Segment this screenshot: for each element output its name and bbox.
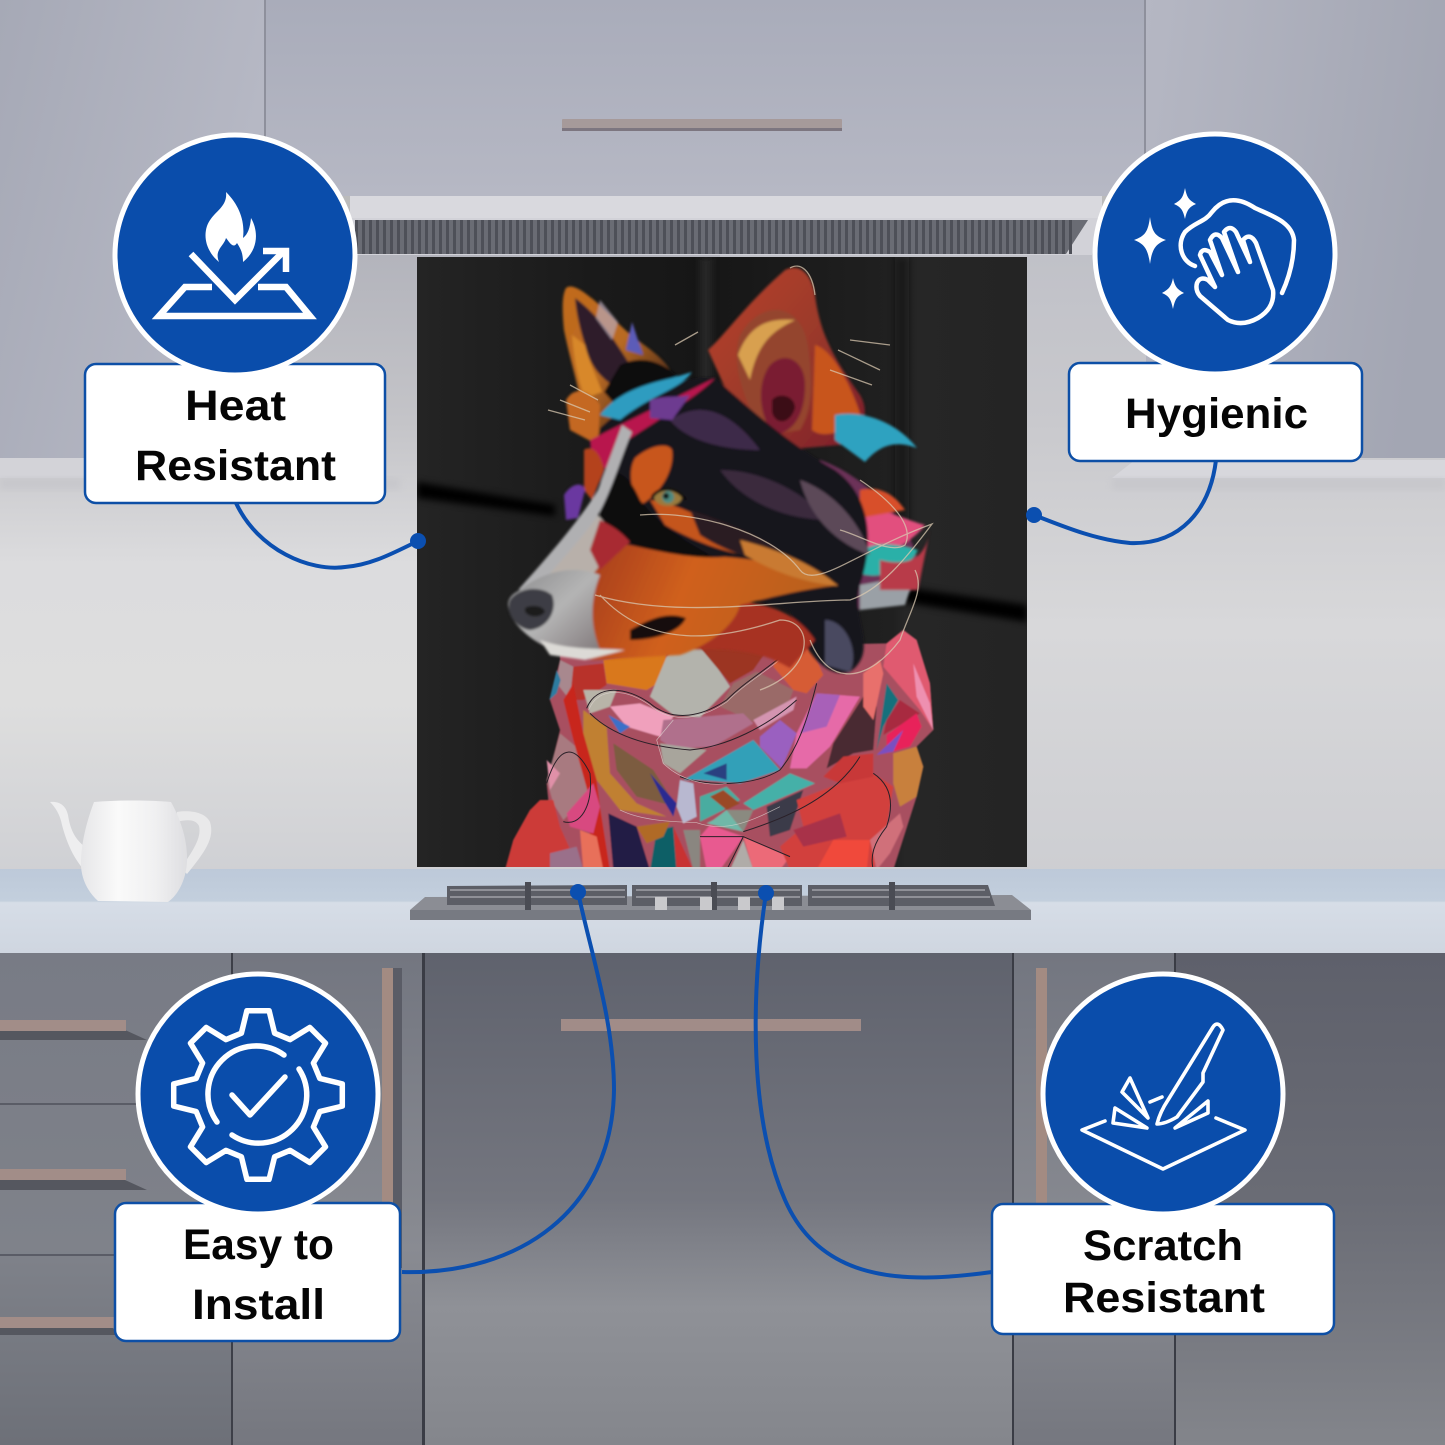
label box (85, 364, 385, 503)
icon: flame over deflected arrow (159, 192, 310, 316)
chest base and mosaic patches (505, 630, 933, 870)
icon circle (1095, 134, 1335, 374)
fur right side (835, 414, 917, 462)
white muzzle stripe (518, 425, 632, 590)
callout: scratch resistant (992, 974, 1334, 1334)
eye (654, 488, 682, 506)
icon circle (115, 135, 355, 375)
dog chest ribbons (505, 630, 933, 870)
label text: Install (192, 1281, 325, 1329)
icon: gear with check mark (174, 1011, 342, 1179)
cabinet handles (0, 968, 1047, 1335)
upper cabinet handle (562, 119, 842, 131)
teal and magenta forehead bands (600, 372, 692, 420)
label box (992, 1204, 1334, 1334)
extractor hood (350, 196, 1102, 255)
mouth dark mark (630, 615, 686, 640)
orange cheek (585, 540, 838, 660)
ribbon outline strands (547, 647, 891, 870)
black forehead and neck mass (598, 378, 868, 673)
gas hob (410, 882, 1031, 920)
label text: Easy to (183, 1221, 334, 1269)
callout: heat resistant (85, 135, 385, 503)
label text: Heat (185, 382, 286, 430)
label text: Resistant (135, 442, 336, 490)
callout: easy to install (115, 974, 400, 1341)
dog head fur (508, 268, 930, 673)
label text: Scratch (1083, 1222, 1243, 1270)
right ear (708, 268, 865, 450)
connector: heat resistant (236, 503, 426, 568)
label text: Resistant (1063, 1274, 1265, 1322)
grey muzzle (508, 570, 600, 654)
upper cabinets (0, 0, 1445, 490)
label box (1069, 363, 1362, 461)
label text: Hygienic (1125, 390, 1308, 438)
worktop (0, 869, 1445, 953)
flowing hair strands (548, 266, 932, 690)
panel reflections (417, 257, 1027, 622)
jaw red under cheek (694, 600, 817, 668)
connector: hygienic (1026, 460, 1216, 543)
wall (0, 255, 1445, 875)
label text (135, 382, 336, 490)
left ear (563, 286, 672, 440)
black mask behind eye (598, 474, 710, 556)
lower cabinets (0, 953, 1445, 1445)
label text (183, 1221, 334, 1329)
orange brow (631, 446, 672, 505)
connector: easy to install (402, 884, 614, 1272)
label text (1063, 1222, 1265, 1322)
connector: scratch resistant (756, 885, 992, 1277)
icon: hand wiping with sparkles (1134, 188, 1294, 323)
callout: hygienic (1069, 134, 1362, 461)
teapot (50, 800, 211, 902)
icon circle (138, 974, 378, 1214)
glass splashback panel with dog artwork (417, 257, 1027, 870)
icon: knife scratching surface (1082, 1024, 1245, 1169)
label box (115, 1203, 400, 1341)
icon circle (1043, 974, 1283, 1214)
